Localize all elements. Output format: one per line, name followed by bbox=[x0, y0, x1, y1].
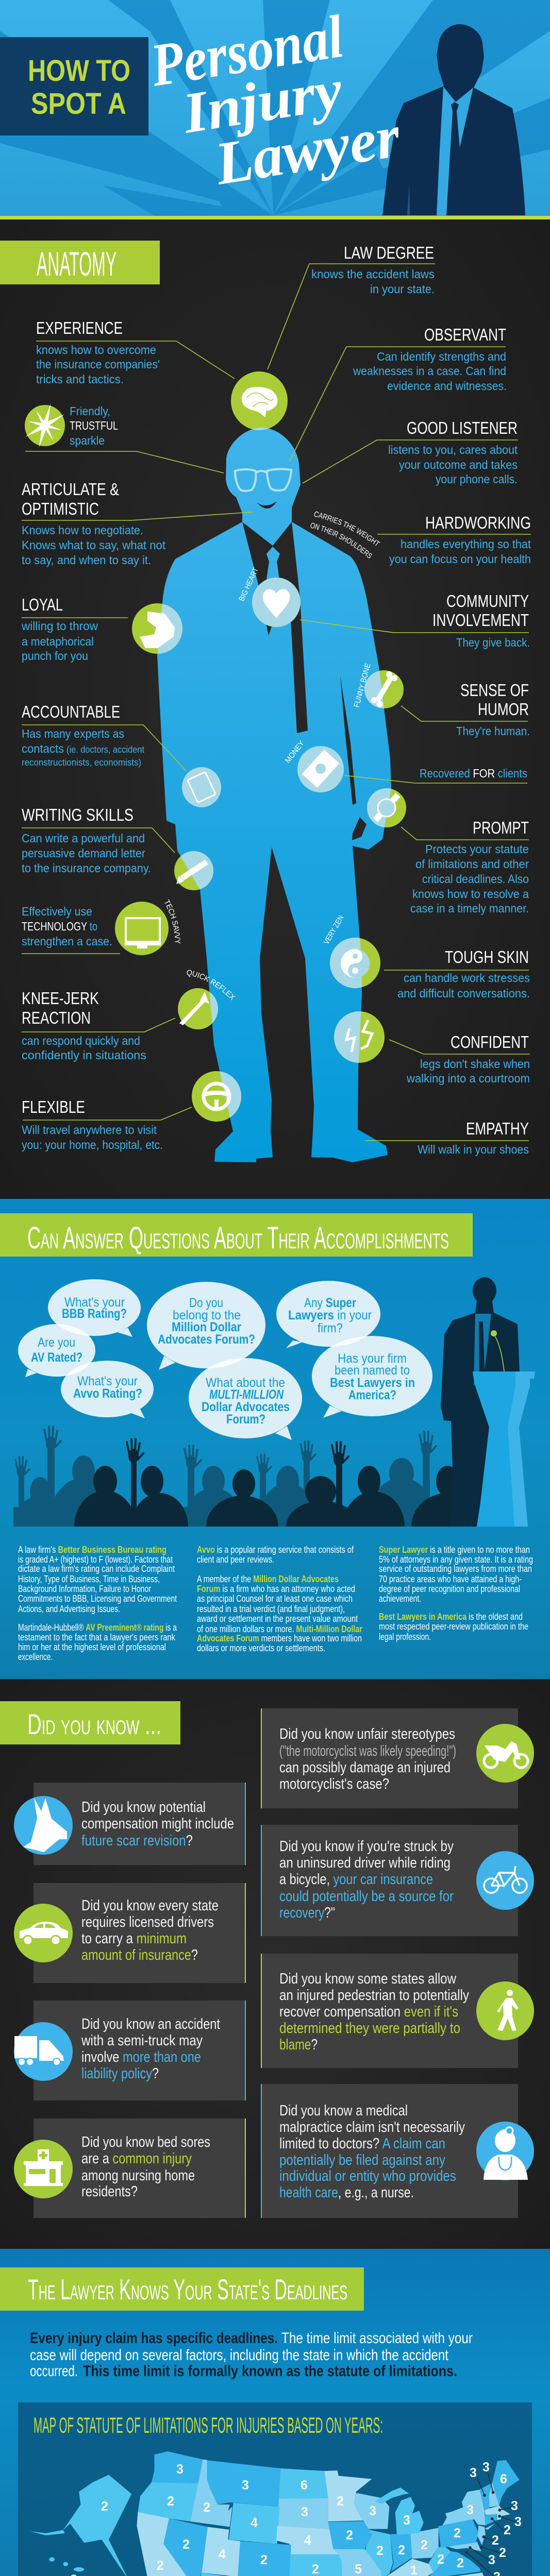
callout: technology bbox=[22, 905, 120, 954]
icon: nursing home bbox=[14, 2140, 73, 2198]
card: minimum insurance: requires licensed drivers bbox=[81, 1914, 214, 1930]
text block: rating explanation middle: Avvo is a popular rating service that consists of bbox=[197, 1545, 354, 1555]
bubble: million dollar advocates: Do you bbox=[189, 1296, 223, 1310]
callout: tough skin bbox=[384, 947, 530, 1000]
state year numbers: 2 bbox=[492, 2533, 499, 2548]
tag: quick reflex: QUICK REFLEX bbox=[187, 970, 236, 1001]
icon: pen bbox=[174, 851, 213, 890]
bubble: best lawyers: Has your firm bbox=[338, 1351, 407, 1366]
bubble: multi-million bbox=[189, 1358, 302, 1440]
icon: money bbox=[297, 746, 344, 792]
callout: articulate and optimistic bbox=[22, 480, 253, 567]
bubble: bbb rating: What's your bbox=[64, 1295, 125, 1310]
callout: flexible: Will travel anywhere to visit bbox=[22, 1123, 157, 1137]
card: scar revision: future scar revision? bbox=[81, 1833, 193, 1849]
card: scar revision bbox=[14, 1783, 246, 1865]
callout: good listener: GOOD LISTENER bbox=[407, 418, 518, 437]
icon: sparkle bbox=[24, 403, 66, 448]
card: medical malpractice: health care, e.g., a nurse. bbox=[279, 2184, 414, 2201]
callout: confident bbox=[389, 1032, 530, 1085]
callout: sense of humor: They're human. bbox=[456, 724, 530, 738]
callout: articulate and optimistic: Knows how to negotiate. bbox=[22, 523, 143, 537]
bubble: bbb rating bbox=[48, 1279, 141, 1337]
callout: loyal: a metaphorical bbox=[22, 635, 94, 648]
callout: technology: strengthen a case. bbox=[22, 935, 112, 948]
bubble: best lawyers: America? bbox=[348, 1388, 396, 1402]
card: motorcyclist stereotypes: can possibly damage an injured bbox=[279, 1759, 451, 1776]
callout: writing skills: WRITING SKILLS bbox=[22, 805, 134, 824]
card: bicycle uninsured driver: could potentially be a source for bbox=[279, 1888, 454, 1905]
callout: sense of humor bbox=[401, 681, 530, 738]
state year numbers: 2 bbox=[203, 2500, 210, 2515]
callout: law degree: LAW DEGREE bbox=[344, 243, 434, 262]
bubble: multi-million: Forum? bbox=[226, 1412, 265, 1427]
state year numbers: 2 bbox=[437, 2552, 444, 2567]
panel: accomplishments bbox=[0, 1199, 550, 1679]
callout: experience: knows how to overcome bbox=[36, 343, 156, 357]
callout: law degree: knows the accident laws bbox=[311, 267, 435, 281]
callout: confident: walking into a courtroom bbox=[406, 1072, 530, 1085]
icon: bone bbox=[364, 670, 404, 708]
card: medical malpractice: malpractice claim isn't necessarily bbox=[279, 2119, 465, 2136]
callout: good listener: your phone calls. bbox=[436, 472, 518, 486]
icon: car bbox=[14, 1904, 73, 1962]
text block: intro paragraph: The time limit associated with your bbox=[281, 2330, 473, 2347]
callout: empathy: Will walk in your shoes bbox=[418, 1143, 529, 1156]
bubble: multi-million: What about the bbox=[206, 1376, 285, 1390]
card: bicycle uninsured driver bbox=[261, 1825, 534, 1936]
text block: rating explanation middle: award or settlement in the present value amount bbox=[197, 1614, 358, 1624]
card: medical malpractice: individual or entity who provides bbox=[279, 2168, 456, 2184]
callout: knee-jerk reaction: confidently in situations bbox=[22, 1048, 146, 1062]
text block: intro paragraph: This time limit is formally known as the statute of limitations. bbox=[83, 2363, 457, 2380]
callout: writing skills bbox=[22, 805, 175, 875]
callout: observant: Can identify strengths and bbox=[377, 350, 506, 363]
bubble: av rated bbox=[18, 1324, 95, 1377]
hawaii bbox=[49, 2557, 94, 2576]
state year numbers: 2 bbox=[457, 2556, 464, 2570]
text block: rating explanation right: Super Lawyer is a title given to no more than bbox=[379, 1545, 530, 1555]
card: medical malpractice bbox=[261, 2084, 534, 2218]
illustration: speaker at podium bbox=[441, 1277, 535, 1527]
bubble: million dollar advocates: Advocates Forum? bbox=[158, 1332, 255, 1347]
card: minimum insurance: amount of insurance? bbox=[81, 1947, 198, 1963]
callout: loyal: punch for you bbox=[22, 649, 88, 663]
title box: how to spot a: HOW TO bbox=[28, 54, 130, 88]
card: motorcyclist stereotypes bbox=[261, 1708, 534, 1808]
header panel bbox=[0, 0, 550, 216]
callout: observant bbox=[289, 325, 507, 462]
text block: rating explanation middle: Forum is a firm who has an attorney who acted bbox=[197, 1584, 355, 1594]
callout: observant: weaknesses in a case. Can find bbox=[353, 364, 506, 378]
callout: prompt: of limitations and other bbox=[415, 857, 529, 871]
callout: writing skills: Can write a powerful and bbox=[22, 832, 145, 845]
icon: monitor bbox=[115, 902, 169, 955]
curved tag: carries the weight on their shoulders: ON THEIR SHOULDERS bbox=[310, 522, 372, 558]
bubble: av rated: AV Rated? bbox=[31, 1350, 82, 1365]
script title: personal injury lawyer: Lawyer bbox=[210, 102, 405, 198]
state year numbers: 3 bbox=[176, 2462, 184, 2477]
bubble: million dollar advocates bbox=[147, 1282, 265, 1370]
callout: good listener: listens to you, cares about bbox=[388, 443, 518, 456]
card: bicycle uninsured driver: an uninsured driver while riding bbox=[279, 1855, 451, 1871]
text block: rating explanation left: dictate a law firm's rating can include Complaint bbox=[18, 1564, 175, 1574]
title box: how to spot a: SPOT A bbox=[31, 87, 126, 121]
callout: technology: Effectively use bbox=[22, 905, 92, 918]
card: semi-truck liability: with a semi-truck may bbox=[81, 2032, 203, 2049]
text block: rating explanation left: Martindale-Hubbell® AV Preeminent® rating is a bbox=[18, 1622, 177, 1633]
text block: rating explanation middle: as principal Counsel for at least one case which bbox=[197, 1594, 353, 1604]
text block: rating explanation left: Actions, and Advertising Issues. bbox=[18, 1604, 120, 1614]
callout: articulate and optimistic: ARTICULATE & bbox=[22, 480, 119, 499]
heading: the lawyer knows your state's deadlines: The Lawyer Knows Your State's Deadlines bbox=[28, 2273, 347, 2306]
heading: anatomy tab bbox=[0, 241, 160, 284]
callout: prompt: critical deadlines. Also bbox=[422, 872, 529, 886]
card: bed sores: are a common injury bbox=[81, 2150, 192, 2167]
callout: tough skin: and difficult conversations. bbox=[397, 987, 530, 1000]
text block: rating explanation right: legal profession. bbox=[379, 1632, 431, 1642]
card: bicycle uninsured driver: Did you know if you're struck by bbox=[279, 1838, 454, 1855]
state year numbers: 2 bbox=[499, 2546, 506, 2560]
callout: hardworking: you can focus on your health bbox=[389, 552, 531, 566]
heading: anatomy tab: ANATOMY bbox=[37, 245, 116, 283]
state year numbers: 2 bbox=[167, 2494, 174, 2509]
state year numbers: 6 bbox=[301, 2478, 308, 2493]
state year numbers: 2 bbox=[398, 2543, 405, 2557]
state year numbers bbox=[70, 2460, 522, 2576]
callout: observant: OBSERVANT bbox=[424, 325, 506, 344]
tag: funny bone: FUNNY BONE bbox=[352, 663, 373, 708]
callout: accountable: reconstructionists, economists) bbox=[22, 757, 141, 768]
card: injured pedestrian bbox=[261, 1954, 534, 2068]
text block: intro paragraph: occurred. bbox=[30, 2363, 78, 2380]
state year numbers: 3 bbox=[403, 2513, 410, 2528]
icon: shaking legs bbox=[334, 1011, 385, 1063]
text block: intro paragraph: Every injury claim has specific deadlines. bbox=[30, 2330, 278, 2347]
callout: community involvement: They give back. bbox=[456, 636, 530, 649]
card: injured pedestrian: determined they were partially to bbox=[279, 2020, 460, 2037]
state year numbers: 2 bbox=[157, 2558, 164, 2573]
callout: writing skills: to the insurance company. bbox=[22, 861, 151, 875]
callout: accountable: ACCOUNTABLE bbox=[22, 702, 120, 721]
illustration: crowd raising hands bbox=[13, 1427, 488, 1575]
text block: rating explanation left: Commitments to BBB, Licensing and Government bbox=[18, 1594, 177, 1604]
callout: sense of humor: SENSE OF bbox=[460, 681, 529, 700]
state year numbers: 2 bbox=[260, 2553, 268, 2567]
state year numbers: 2 bbox=[337, 2494, 344, 2509]
icon: tablet bbox=[182, 767, 221, 807]
card: scar revision: Did you know potential bbox=[81, 1799, 206, 1816]
bubble: best lawyers: Best Lawyers in bbox=[330, 1376, 415, 1390]
callout: community involvement: COMMUNITY bbox=[446, 591, 529, 611]
callout: flexible bbox=[22, 1097, 192, 1151]
card: minimum insurance bbox=[14, 1883, 246, 1983]
icon: yin yang bbox=[330, 938, 380, 988]
callout: tough skin: can handle work stresses bbox=[404, 971, 530, 985]
state year numbers: 2 bbox=[346, 2528, 353, 2543]
script title: personal injury lawyer bbox=[146, 3, 405, 198]
tag: very zen: VERY ZEN bbox=[322, 914, 345, 946]
state year numbers: 3 bbox=[301, 2505, 308, 2519]
card: injured pedestrian: recover compensation even if it's bbox=[279, 2004, 458, 2020]
icon: brain bbox=[231, 371, 288, 430]
callout: prompt: Protects your statute bbox=[425, 842, 529, 856]
card: bicycle uninsured driver: recovery?" bbox=[279, 1905, 335, 1921]
callout: knee-jerk reaction bbox=[22, 989, 175, 1062]
heading: did you know: Did you know ... bbox=[27, 1708, 161, 1740]
callout: experience: EXPERIENCE bbox=[36, 318, 123, 337]
icon: steering wheel bbox=[192, 1071, 241, 1122]
state year numbers: 2 bbox=[504, 2523, 511, 2537]
callout: law degree bbox=[268, 243, 435, 369]
callout: law degree: in your state. bbox=[370, 282, 435, 296]
callout: friendly sparkle bbox=[25, 404, 224, 473]
callout: prompt: knows how to resolve a bbox=[412, 887, 529, 901]
callout: friendly sparkle: sparkle bbox=[70, 434, 105, 447]
text block: intro paragraph: case will depend on several factors, including the state in which the accident bbox=[30, 2347, 449, 2364]
card: semi-truck liability bbox=[14, 2001, 246, 2100]
callout: prompt: case in a timely manner. bbox=[410, 902, 529, 915]
card: minimum insurance: to carry a minimum bbox=[81, 1930, 187, 1947]
state year numbers: 2 bbox=[376, 2544, 384, 2558]
callout: knee-jerk reaction: KNEE-JERK bbox=[22, 989, 99, 1008]
card: bed sores: among nursing home bbox=[81, 2167, 195, 2184]
card: medical malpractice: Did you know a medical bbox=[279, 2103, 408, 2119]
card: injured pedestrian: blame? bbox=[279, 2037, 318, 2053]
state year numbers: 2 bbox=[454, 2526, 461, 2540]
callout: articulate and optimistic: OPTIMISTIC bbox=[22, 499, 99, 518]
state year numbers: 4 bbox=[219, 2547, 226, 2562]
icon: watch bbox=[367, 788, 406, 827]
callout: friendly sparkle: TRUSTFUL bbox=[70, 419, 118, 432]
smile bbox=[257, 501, 277, 509]
bubble: bbb rating: BBB Rating? bbox=[62, 1307, 127, 1321]
callout: loyal bbox=[21, 595, 128, 663]
callout: tough skin: TOUGH SKIN bbox=[445, 947, 529, 967]
callout: prompt: PROMPT bbox=[473, 818, 529, 837]
state year numbers: 3 bbox=[470, 2466, 477, 2480]
tag: money: MONEY bbox=[284, 739, 306, 765]
icon: dog bbox=[14, 1796, 73, 1855]
text block: rating explanation middle: dollars or more verdicts or settlements. bbox=[197, 1643, 325, 1653]
script title: personal injury lawyer: Injury bbox=[177, 58, 347, 146]
state year numbers: 3 bbox=[488, 2553, 495, 2567]
card: motorcyclist stereotypes: Did you know unfair stereotypes bbox=[279, 1726, 455, 1742]
callout: accountable: contacts bbox=[22, 742, 64, 755]
bubble: best lawyers bbox=[312, 1336, 432, 1418]
callout: community involvement: INVOLVEMENT bbox=[432, 611, 529, 630]
bubble: million dollar advocates: Million Dollar bbox=[172, 1320, 241, 1334]
callout: prompt bbox=[401, 818, 529, 915]
callout: flexible: FLEXIBLE bbox=[22, 1097, 85, 1116]
card: scar revision: compensation might include bbox=[81, 1816, 234, 1832]
callout: hardworking: handles everything so that bbox=[401, 537, 531, 551]
callout: good listener: your outcome and takes bbox=[399, 458, 518, 471]
text block: rating explanation middle: Advocates Forum members have won two million bbox=[197, 1633, 362, 1643]
bubble: avvo rating: What's your bbox=[77, 1374, 138, 1388]
text block: rating explanation right: Best Lawyers in America is the oldest and bbox=[379, 1612, 523, 1622]
state year numbers: 3 bbox=[511, 2499, 518, 2513]
callout: experience: the insurance companies' bbox=[36, 358, 160, 371]
state year numbers: 3 bbox=[242, 2478, 249, 2493]
figure: blue lawyer silhouette bbox=[149, 422, 397, 1167]
state year numbers: 3 bbox=[514, 2515, 522, 2529]
heading: did you know bbox=[0, 1701, 180, 1744]
text block: rating explanation left: excellence. bbox=[18, 1652, 53, 1662]
bubble: multi-million: Dollar Advocates bbox=[202, 1400, 290, 1414]
bubble: avvo rating: Avvo Rating? bbox=[73, 1386, 142, 1401]
callout: accountable bbox=[22, 702, 186, 771]
callout: confident: CONFIDENT bbox=[451, 1032, 529, 1052]
callout: community involvement bbox=[300, 591, 530, 649]
card: injured pedestrian: Did you know some states allow bbox=[279, 1971, 457, 1987]
state year numbers: 2 bbox=[182, 2537, 190, 2552]
callout: good listener bbox=[303, 418, 518, 486]
bubble: super lawyers: firm? bbox=[318, 1321, 343, 1335]
panel: state deadlines bbox=[0, 2249, 550, 2576]
panel: anatomy bbox=[0, 241, 531, 1162]
text block: rating explanation middle: of one million dollars or more. Multi-Million Dollar bbox=[197, 1624, 362, 1634]
callout: empathy: EMPATHY bbox=[466, 1119, 529, 1138]
callout: hardworking bbox=[377, 513, 531, 566]
bubble: super lawyers: Any Super bbox=[304, 1296, 356, 1310]
callout: observant: evidence and witnesses. bbox=[387, 379, 507, 393]
curved tag: carries the weight on their shoulders: CARRIES THE WEIGHT bbox=[314, 511, 380, 546]
callout: articulate and optimistic: Knows what to say, what not bbox=[22, 538, 166, 552]
callout: loyal: willing to throw bbox=[21, 619, 98, 633]
callout: experience bbox=[36, 318, 235, 386]
map: united states bbox=[30, 2451, 522, 2576]
callout: knee-jerk reaction: REACTION bbox=[22, 1008, 91, 1027]
text block: rating explanation middle: resulted in a trial verdict (and final judgment), bbox=[197, 1604, 345, 1614]
callout: friendly sparkle: Friendly, bbox=[70, 404, 110, 418]
card: bed sores: Did you know bed sores bbox=[81, 2134, 210, 2150]
speech bubbles bbox=[18, 1279, 432, 1440]
card: bed sores: residents? bbox=[81, 2183, 138, 2200]
text block: rating explanation left: Background Information, Failure to Honor bbox=[18, 1584, 151, 1594]
icon: muscle bbox=[132, 603, 182, 654]
heading: the lawyer knows your state's deadlines bbox=[0, 2267, 364, 2311]
text block: rating explanation right: achievement. bbox=[379, 1594, 421, 1604]
connector lines bbox=[477, 2473, 515, 2541]
icon: glasses bbox=[235, 469, 291, 491]
state year numbers: 3 bbox=[466, 2503, 474, 2517]
card: motorcyclist stereotypes: ("the motorcyclist was likely speeding!") bbox=[279, 1743, 456, 1759]
text block: rating explanation left: History, Type of Business, Time in Business, bbox=[18, 1574, 160, 1584]
card: minimum insurance: Did you know every state bbox=[81, 1897, 219, 1914]
text block: rating explanation left: him or her at the highest level of professional bbox=[18, 1642, 166, 1652]
text block: rating explanation middle: client and peer reviews. bbox=[197, 1554, 274, 1565]
state year numbers: 2 bbox=[421, 2538, 428, 2552]
card: bicycle uninsured driver: a bicycle, your car insurance bbox=[279, 1871, 433, 1888]
callout: confident: legs don't shake when bbox=[420, 1057, 530, 1071]
bubble: best lawyers: been named to bbox=[335, 1363, 410, 1378]
state year numbers: 3 bbox=[369, 2504, 376, 2518]
card: semi-truck liability: liability policy? bbox=[81, 2065, 159, 2082]
title box: how to spot a bbox=[0, 37, 148, 135]
callout: experience: tricks and tactics. bbox=[36, 372, 124, 386]
bubble: av rated: Are you bbox=[38, 1335, 75, 1350]
state year numbers: 2 bbox=[101, 2499, 108, 2514]
bubble: million dollar advocates: belong to the bbox=[173, 1308, 241, 1323]
tag: tech savvy: TECH SAVVY bbox=[165, 900, 180, 944]
card: motorcyclist stereotypes: motorcyclist's case? bbox=[279, 1776, 389, 1792]
icon: big heart bbox=[252, 578, 301, 627]
text block: rating explanation left bbox=[18, 1545, 177, 1662]
callout: knee-jerk reaction: can respond quickly and bbox=[22, 1034, 140, 1047]
panel: statute of limitations map bbox=[18, 2402, 532, 2576]
callout: flexible: you: your home, hospital, etc. bbox=[22, 1138, 163, 1151]
state year numbers: 4 bbox=[304, 2533, 311, 2548]
callout: accountable: Has many experts as bbox=[22, 727, 124, 740]
card: semi-truck liability: involve more than one bbox=[81, 2049, 201, 2065]
alaska bbox=[63, 2475, 131, 2576]
state year numbers: 4 bbox=[251, 2516, 258, 2530]
bubble: multi-million: MULTI-MILLION bbox=[209, 1387, 284, 1402]
icon: truck bbox=[14, 2022, 73, 2081]
text block: rating explanation right bbox=[379, 1545, 533, 1642]
card: bed sores bbox=[14, 2119, 246, 2218]
icon: bicycle bbox=[476, 1851, 534, 1910]
text block: intro paragraph bbox=[30, 2330, 473, 2380]
text block: rating explanation left: is graded A+ (highest) to F (lowest). Factors that bbox=[18, 1554, 173, 1565]
card: medical malpractice: limited to doctors? A claim can bbox=[279, 2136, 445, 2152]
heading: can answer questions bbox=[0, 1213, 473, 1257]
callout: recovered for clients: Recovered FOR clients bbox=[420, 767, 527, 780]
bubble: super lawyers: Lawyers in your bbox=[288, 1308, 372, 1323]
script title: personal injury lawyer: Personal bbox=[146, 3, 348, 99]
icon: reflex hammer bbox=[178, 988, 218, 1029]
card: semi-truck liability: Did you know an accident bbox=[81, 2016, 220, 2032]
text block: rating explanation middle bbox=[197, 1545, 362, 1653]
icon: doctor bbox=[476, 2122, 534, 2180]
callout: accountable: (ie. doctors, accident bbox=[66, 744, 144, 755]
bubble: super lawyers bbox=[276, 1281, 380, 1348]
callout: loyal: LOYAL bbox=[22, 595, 63, 614]
callout: writing skills: persuasive demand letter bbox=[22, 846, 145, 860]
icon: motorcycle bbox=[476, 1724, 534, 1783]
state year numbers: 3 bbox=[482, 2460, 490, 2475]
callout: recovered for clients bbox=[344, 767, 527, 783]
callout: articulate and optimistic: to say, and when to say it. bbox=[22, 553, 151, 567]
text block: rating explanation left: A law firm's Better Business Bureau rating bbox=[18, 1545, 166, 1555]
state year numbers: 6 bbox=[500, 2472, 507, 2486]
silhouette: lawyer in suit bbox=[382, 24, 525, 215]
callout: empathy bbox=[365, 1119, 529, 1156]
card: injured pedestrian: an injured pedestrian to potentially bbox=[279, 1987, 469, 2004]
callout: technology: TECHNOLOGY to bbox=[22, 920, 97, 933]
text block: rating explanation left: testament to the fact that a lawyer's peers rank bbox=[18, 1632, 176, 1642]
callout: sense of humor: HUMOR bbox=[478, 700, 529, 719]
panel: did you know bbox=[0, 1679, 550, 2249]
text block: rating explanation middle: A member of the Million Dollar Advocates bbox=[197, 1574, 339, 1584]
bubble: avvo rating bbox=[61, 1361, 154, 1418]
icon: pedestrian bbox=[476, 1981, 534, 2040]
card: medical malpractice: potentially be filed against any bbox=[279, 2152, 445, 2168]
tag: big heart: BIG HEART bbox=[237, 566, 260, 603]
